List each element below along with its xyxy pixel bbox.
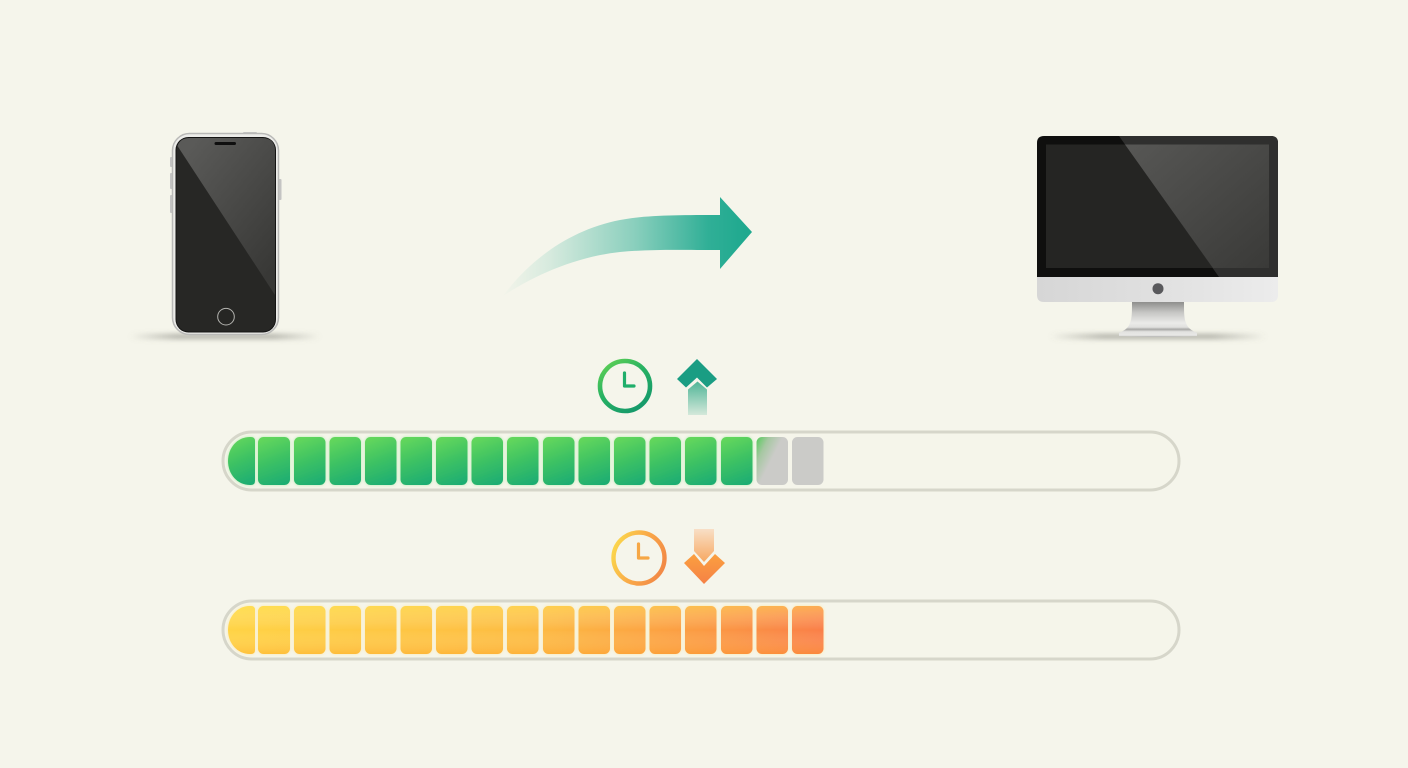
down arrow stem [694,529,714,562]
phone body [172,134,278,334]
icon: up arrow [677,359,717,415]
icon: down arrow [684,529,725,584]
monitor bezel glare [1119,136,1278,277]
amber track outline [223,601,1179,659]
monitor ground shadow [1050,334,1266,338]
clock ring [600,361,650,411]
down arrow head [684,554,725,584]
icon: smartphone [130,132,320,338]
arrow: curved transfer arrow [503,197,752,296]
clock hands [624,373,634,386]
phone display [176,138,275,332]
phone side buttons [170,132,282,213]
monitor chin [1037,276,1278,302]
icon: green clock [600,361,650,411]
clock hands [638,544,648,558]
empty grey segment [792,437,824,485]
monitor screen glare [1125,144,1269,268]
monitor bezel [1037,136,1278,277]
amber filled segments [228,606,824,654]
phone ground shadow [130,334,320,338]
progress bar: amber track [223,601,1179,659]
phone screen [176,137,276,332]
clock ring [614,532,664,584]
phone home button [218,308,234,325]
monitor screen [1046,144,1269,268]
icon: desktop monitor [1037,136,1278,338]
phone screen glare [178,138,275,295]
monitor stand [1119,302,1197,337]
up arrow head [677,359,717,388]
green filled segments [228,437,752,485]
up arrow stem [688,382,707,415]
phone speaker [214,142,236,145]
green track outline [223,432,1179,490]
monitor logo [1152,283,1164,294]
progress bar: green track [223,432,1179,490]
icon: amber clock [614,532,664,584]
partially filled segment [756,437,788,485]
